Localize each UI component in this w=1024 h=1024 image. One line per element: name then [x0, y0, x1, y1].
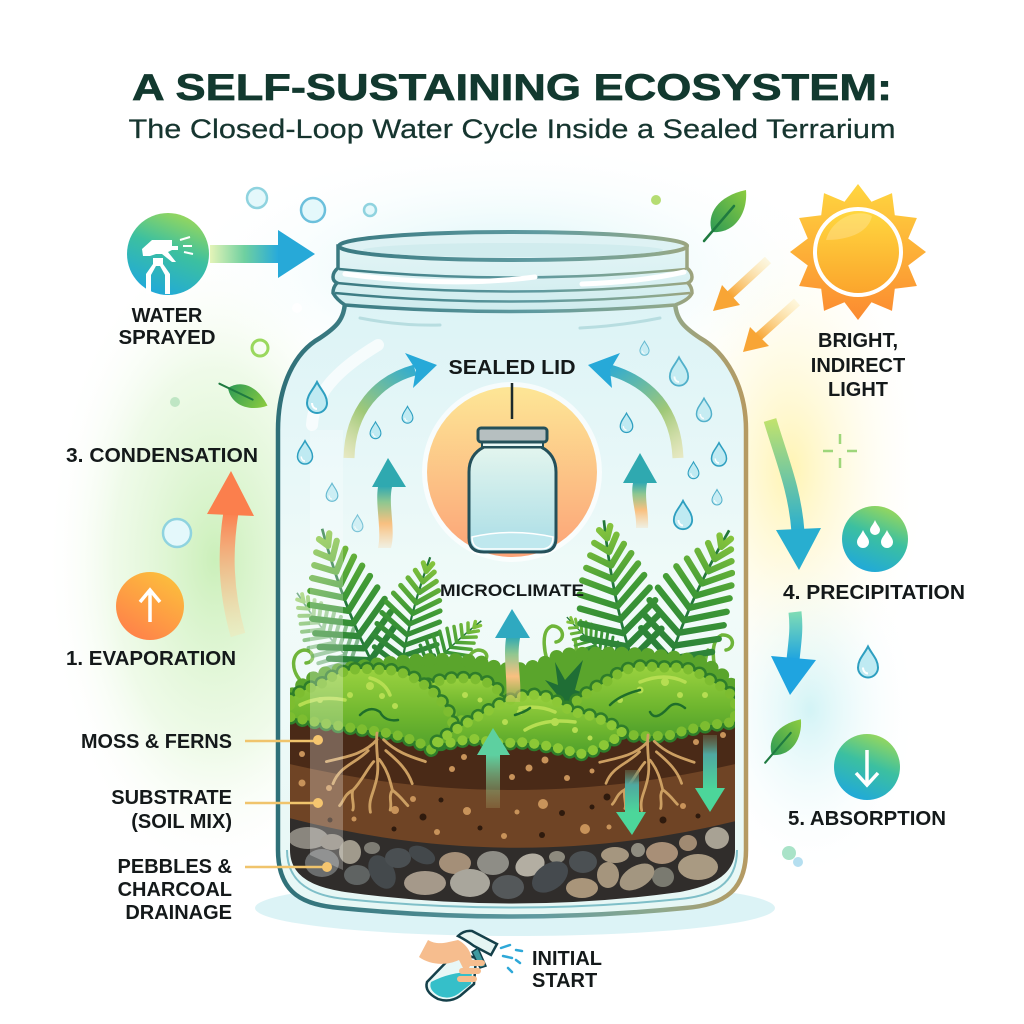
label: bright indirect light: INDIRECT	[811, 355, 905, 377]
label: water sprayed: WATER	[132, 305, 203, 327]
fingers	[460, 963, 482, 979]
icon: leaf left	[219, 373, 268, 416]
icon: spray bottle and hand	[419, 931, 522, 1000]
fern plants	[295, 520, 735, 669]
label: microclimate: MICROCLIMATE	[440, 581, 584, 600]
arrow: precipitation upper	[770, 420, 821, 570]
icon: leaf top	[704, 190, 746, 241]
layer label: pebbles: CHARCOAL	[118, 879, 232, 901]
arrow: vapour left to lid	[349, 353, 437, 458]
left callout: water sprayed: SPRAYED	[118, 327, 216, 349]
label: initial start: INITIAL	[532, 948, 602, 970]
arrow: sunlight lower	[743, 302, 797, 352]
layer label: moss and ferns	[81, 731, 323, 753]
layer label: moss and ferns: MOSS & FERNS	[81, 731, 232, 753]
label: evaporation: 1. EVAPORATION	[66, 648, 236, 670]
fiddleheads	[294, 626, 732, 680]
sparkle	[823, 434, 857, 468]
glass highlight arc	[312, 345, 378, 425]
arrow: rising left	[372, 458, 406, 548]
back moss	[290, 646, 735, 696]
icon: spray circle	[127, 213, 209, 295]
icon: sun	[790, 184, 926, 320]
icon: small jar	[469, 428, 556, 552]
glass highlight band	[310, 430, 343, 870]
label: initial start	[532, 948, 602, 992]
bottle	[426, 952, 476, 1000]
label: sealed lid: SEALED LID	[448, 357, 576, 379]
left callout: water sprayed	[118, 213, 315, 349]
moss clumps	[290, 660, 735, 754]
pebbles	[288, 827, 729, 899]
arrow: soil up	[477, 728, 510, 808]
layer label: substrate: (SOIL MIX)	[131, 811, 232, 833]
arrow: absorption	[771, 612, 816, 695]
jar body glass	[278, 300, 746, 916]
title: A SELF-SUSTAINING ECOSYSTEM:	[132, 67, 892, 108]
lid connector line	[511, 383, 513, 419]
pebble base	[290, 818, 735, 904]
arrow: soil down right	[695, 735, 725, 812]
subtitle: The Closed-Loop Water Cycle Inside a Sealed Terrarium	[128, 114, 896, 144]
water droplets	[298, 341, 726, 532]
label: precipitation: 4. PRECIPITATION	[783, 582, 965, 604]
icon: evaporation circle	[116, 572, 184, 640]
microclimate circle with small jar	[422, 382, 602, 562]
trigger head	[458, 931, 497, 955]
icon: leaf right	[765, 719, 801, 763]
label: absorption: 5. ABSORPTION	[788, 808, 946, 830]
arrow: soil down left	[616, 770, 646, 835]
soil top layer	[290, 722, 735, 790]
jar bottom inner line	[287, 850, 737, 908]
small dots	[170, 195, 803, 867]
arrow: rising right	[623, 453, 657, 528]
arrow: spray to jar	[210, 230, 315, 278]
icon: precipitation circle	[842, 506, 908, 572]
label: bright indirect light	[811, 330, 905, 401]
layer label: pebbles: DRAINAGE	[125, 902, 232, 924]
icon: absorption circle	[834, 734, 900, 800]
layer label: pebbles	[118, 856, 332, 924]
white sparkle dot	[292, 303, 302, 313]
label: bright indirect light: BRIGHT,	[818, 330, 898, 352]
jar neck shine	[360, 318, 660, 328]
jar rim	[333, 232, 692, 312]
label: initial start: START	[532, 970, 597, 992]
decorative bubbles	[163, 188, 376, 547]
arrow: condensation	[207, 471, 254, 635]
trigger	[472, 948, 486, 968]
soil speckles	[298, 732, 726, 839]
layer label: substrate	[111, 787, 323, 833]
soil and plants	[290, 520, 735, 904]
hand	[419, 940, 472, 974]
terrarium jar	[273, 232, 755, 920]
arrow: centre rising	[495, 609, 530, 702]
arrows inside jar	[349, 353, 725, 835]
spray	[501, 945, 522, 972]
layer label: pebbles: PEBBLES &	[118, 856, 232, 878]
icon: drop right	[858, 646, 878, 678]
root systems	[326, 733, 694, 812]
arrow: sunlight upper	[713, 260, 768, 311]
layer label: substrate: SUBSTRATE	[111, 787, 232, 809]
label: bright indirect light: LIGHT	[828, 379, 888, 401]
label: condensation: 3. CONDENSATION	[66, 445, 258, 467]
soil mid layer	[285, 763, 740, 848]
arrow: vapour right to lid	[588, 353, 678, 458]
